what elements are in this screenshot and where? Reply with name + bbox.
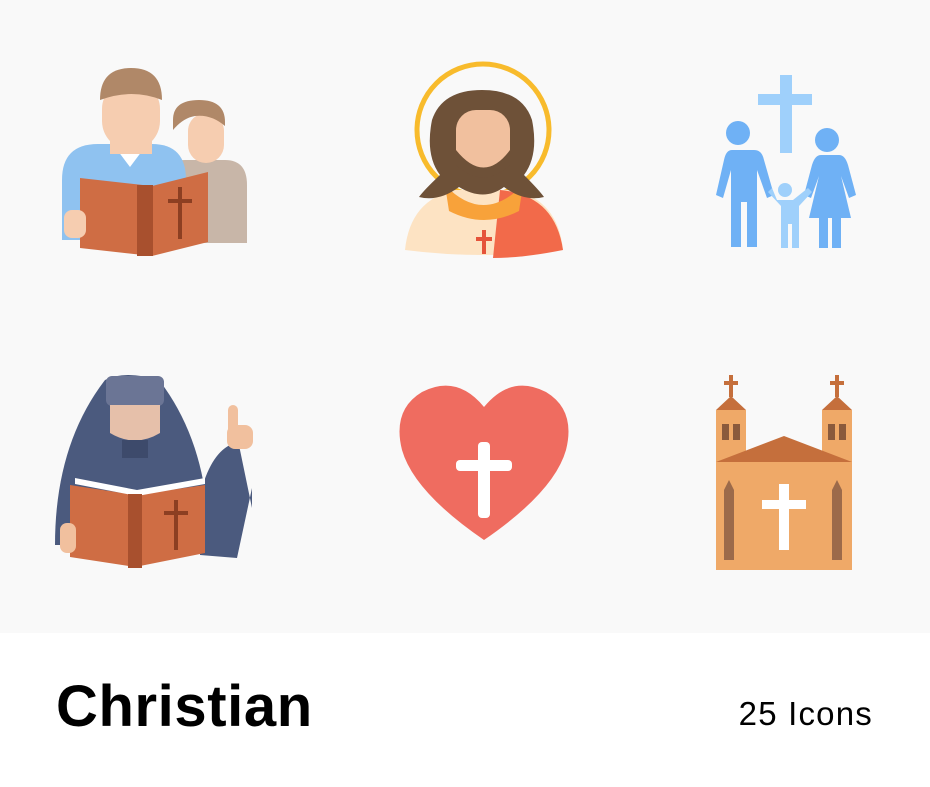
- icon: jesus with halo: [405, 64, 563, 258]
- icon: family with cross: [716, 75, 856, 248]
- icon count: 25 Icons: [739, 695, 873, 732]
- title: Christian: [56, 674, 313, 739]
- icon: nun reading bible: [55, 375, 253, 568]
- icon: heart with cross: [400, 386, 568, 540]
- icon: church: [716, 375, 852, 570]
- icon: father and son reading bible: [62, 68, 247, 256]
